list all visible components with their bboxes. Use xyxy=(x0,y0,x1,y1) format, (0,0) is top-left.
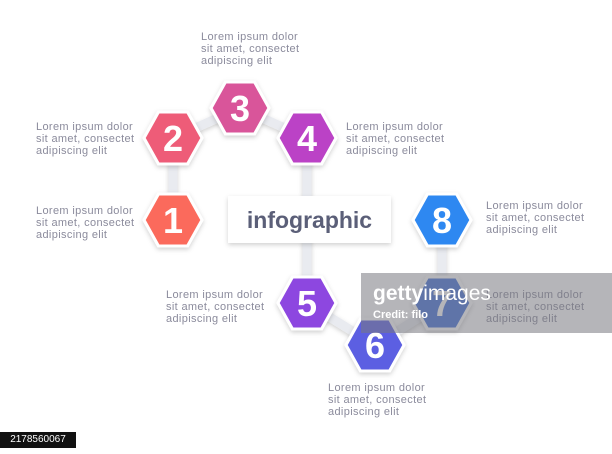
hexagon 3 xyxy=(211,82,269,134)
text 2: Lorem ipsum dolor xyxy=(36,121,133,133)
text 3: Lorem ipsum dolor xyxy=(201,31,298,43)
text 8: adipiscing elit xyxy=(486,224,557,236)
text 1: adipiscing elit xyxy=(36,229,107,241)
watermark band: Credit: filo xyxy=(373,309,428,321)
hexagon 4 xyxy=(278,112,336,164)
id label: 2178560067 xyxy=(10,434,66,445)
hexagon 6 xyxy=(346,319,404,371)
hexagon 4: 4 xyxy=(297,118,317,159)
text 7 xyxy=(486,289,584,325)
text 6: adipiscing elit xyxy=(328,406,399,418)
text 3: sit amet, consectet xyxy=(201,43,299,55)
text 2: adipiscing elit xyxy=(36,145,107,157)
hexagon 2: 2 xyxy=(163,118,183,159)
text 8: sit amet, consectet xyxy=(486,212,584,224)
text 3 xyxy=(201,31,299,67)
text 5: sit amet, consectet xyxy=(166,301,264,313)
text 6: Lorem ipsum dolor xyxy=(328,382,425,394)
text 4: sit amet, consectet xyxy=(346,133,444,145)
hexagon 7 xyxy=(413,277,471,329)
text 7: Lorem ipsum dolor xyxy=(486,289,583,301)
text 6: sit amet, consectet xyxy=(328,394,426,406)
text 1: sit amet, consectet xyxy=(36,217,134,229)
hexagon 8 xyxy=(413,194,471,246)
text 5 xyxy=(166,289,264,325)
text 2 xyxy=(36,121,134,157)
central title box xyxy=(228,196,391,243)
connectors xyxy=(173,108,442,345)
hexagon 5 xyxy=(278,277,336,329)
watermark band: gettyimages xyxy=(373,282,491,305)
text 6 xyxy=(328,382,426,418)
text 8 xyxy=(486,200,584,236)
text 5: adipiscing elit xyxy=(166,313,237,325)
text 2: sit amet, consectet xyxy=(36,133,134,145)
text 5: Lorem ipsum dolor xyxy=(166,289,263,301)
text 4: Lorem ipsum dolor xyxy=(346,121,443,133)
hexagon 7: 7 xyxy=(432,283,452,324)
hexagon 1 xyxy=(144,194,202,246)
text 1: Lorem ipsum dolor xyxy=(36,205,133,217)
hexagon 8: 8 xyxy=(432,200,452,241)
watermark band xyxy=(361,273,612,333)
text 8: Lorem ipsum dolor xyxy=(486,200,583,212)
hexagon 3: 3 xyxy=(230,88,250,129)
hexagon 6: 6 xyxy=(365,325,385,366)
hexagon 1: 1 xyxy=(163,200,183,241)
text 1 xyxy=(36,205,134,241)
hexagon 2 xyxy=(144,112,202,164)
text 3: adipiscing elit xyxy=(201,55,272,67)
text 4 xyxy=(346,121,444,157)
text 7: sit amet, consectet xyxy=(486,301,584,313)
hexagon 5: 5 xyxy=(297,283,317,324)
text 7: adipiscing elit xyxy=(486,313,557,325)
id label xyxy=(0,432,76,448)
central title box: infographic xyxy=(247,207,372,233)
text 4: adipiscing elit xyxy=(346,145,417,157)
